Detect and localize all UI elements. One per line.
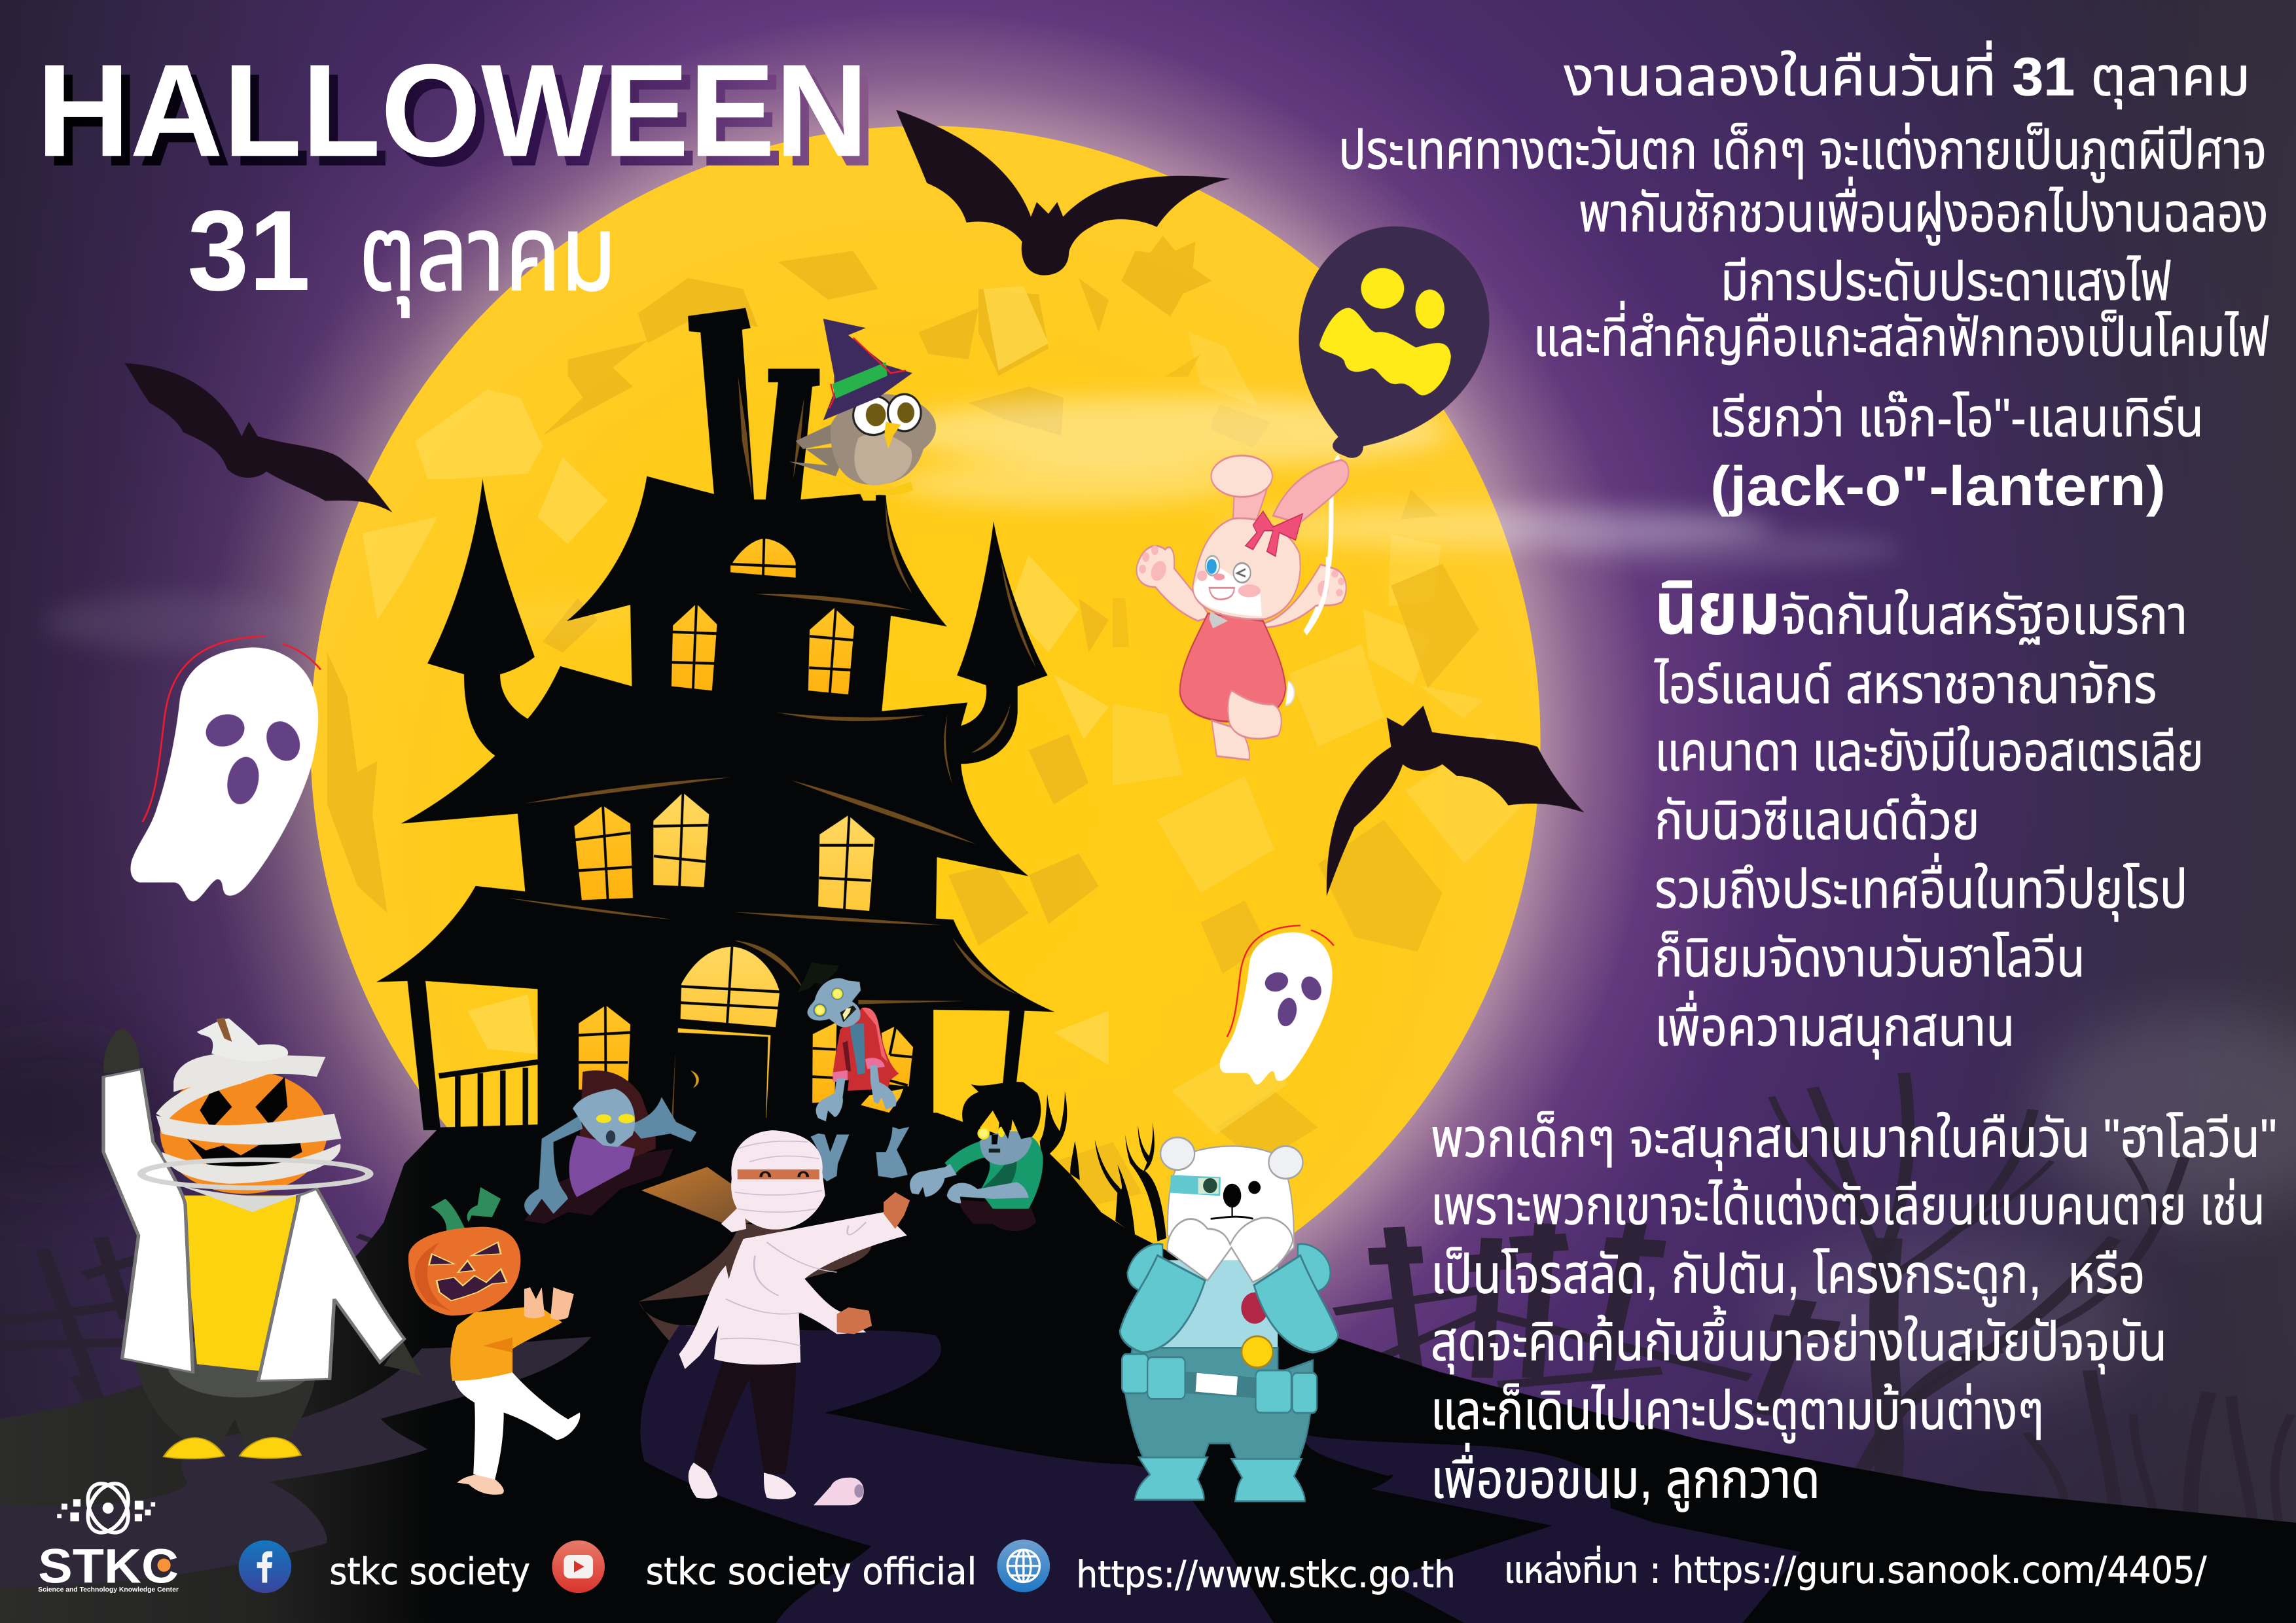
owl with witch hat [789,319,936,501]
text block: what kids do [1431,1107,2277,1512]
logo: STKC [38,1476,179,1594]
haunted house silhouette [376,308,1054,1179]
subtitle: date [187,187,617,317]
mascot: pumpkin-head penguin in lab coat [103,1018,422,1459]
window mullions [575,536,873,1092]
icon: facebook [239,1541,291,1593]
icon: youtube [552,1541,605,1593]
background graveyard crosses and bare trees [1,1073,2291,1525]
footer text: facebook: stkc society [329,1551,530,1594]
right purple path [1304,1435,1801,1623]
subtitle: date: 31 [187,187,310,314]
title: HALLOWEEN: HALLOWEEN [45,46,877,194]
text block: where it is popular: นิยม [1655,568,1780,650]
black hill and winding paths [0,1113,2296,1623]
zombie: red coat [797,962,899,1122]
logo: STKC: Science and Technology Knowledge Center [38,1586,179,1594]
text block: what kids do: สุดจะคิดค้นกันขึ้นมาอย่างในสมัยปัจจุบัน [1431,1305,2167,1374]
zombie: hands from ground [810,1127,909,1181]
window behind red zombie [812,1022,913,1113]
penguin body [135,1363,317,1450]
text block: where it is popular: ก็นิยมจัดงานวันฮาโลวีน [1655,927,2085,988]
zombie: purple dress [524,1070,696,1224]
mascot: polar bear robot [1120,1137,1338,1501]
text block: where it is popular: กับนิวซีแลนด์ด้วย [1655,790,1980,851]
bare tree on hill near bear [1040,1091,1166,1241]
footer text: youtube: stkc society official [646,1551,977,1594]
social footer row [239,1539,2207,1596]
title: HALLOWEEN: HALLOWEEN [37,37,869,184]
brown roof strokes [508,376,1036,1130]
child with pumpkin head [408,1187,580,1495]
text block: where it is popular: เพื่อความสนุกสนาน [1655,990,2015,1060]
balloon with pumpkin face and string [1299,226,1489,633]
logo: STKC: STKC [38,1539,179,1593]
house windows [574,539,854,1092]
porch railing [439,1059,543,1130]
graveyard-side dark path [0,1337,592,1587]
text block: what Halloween is: งานฉลองในคืนวันที่ 31 ตุลาคม [1564,40,2251,109]
text block: what Halloween is: เรียกว่า แจ๊ก-โอ"-แลนเทิร์น [1709,387,2204,448]
footer text: source credit: แหล่งที่มา : https://guru.sanook.com/4405/ [1504,1545,2207,1592]
clouds across the moon [483,397,1903,632]
head bandages [156,1054,341,1212]
full moon with textured patches [310,126,1541,1356]
text block: where it is popular: แคนาดา และยังมีในออสเตรเลีย [1655,721,2204,782]
text block: what Halloween is: (jack-o"-lantern) [1710,455,2166,518]
bat: top centre [896,110,1230,276]
zombie: green shirt [910,1082,1043,1231]
text block: where it is popular: ไอร์แลนด์ สหราชอาณาจักร [1653,654,2157,715]
text block: what kids do: เป็นโจรสลัด, กัปตัน, โครงกระดูก, หรือ [1431,1243,2145,1307]
mummy child with toilet roll [679,1130,910,1505]
ghost: right [1220,925,1334,1084]
footer text: website: https://www.stkc.go.th [1076,1554,1456,1596]
logo atom mark [57,1476,155,1540]
text block: where it is popular: จัดกันในสหรัฐอเมริกา [1780,585,2187,646]
rabbit character [1137,455,1348,760]
purple winding path [640,1325,1274,1623]
pumpkin head [160,1070,327,1194]
ghost: left [130,636,321,901]
subtitle: date: ตุลาคม [359,195,617,317]
text block: what kids do: เพื่อขอขนม, ลูกกวาด [1431,1443,1820,1512]
text block: where it is popular: รวมถึงประเทศอื่นในทวีปยุโรป [1655,853,2187,922]
text block: what Halloween is: มีการประดับประดาแสงไฟ [1721,251,2172,312]
bat: right [1327,705,1585,896]
brown path [638,1222,936,1376]
tan path near porch [641,1167,776,1227]
house body [376,308,1054,1179]
bat: left [124,363,393,512]
text block: what kids do: และก็เดินไปเคาะประตูตามบ้านต่างๆ [1431,1380,2044,1444]
icon: website globe [997,1539,1050,1592]
text block: what Halloween is [1338,40,2270,518]
text block: where it is popular [1653,568,2204,1060]
